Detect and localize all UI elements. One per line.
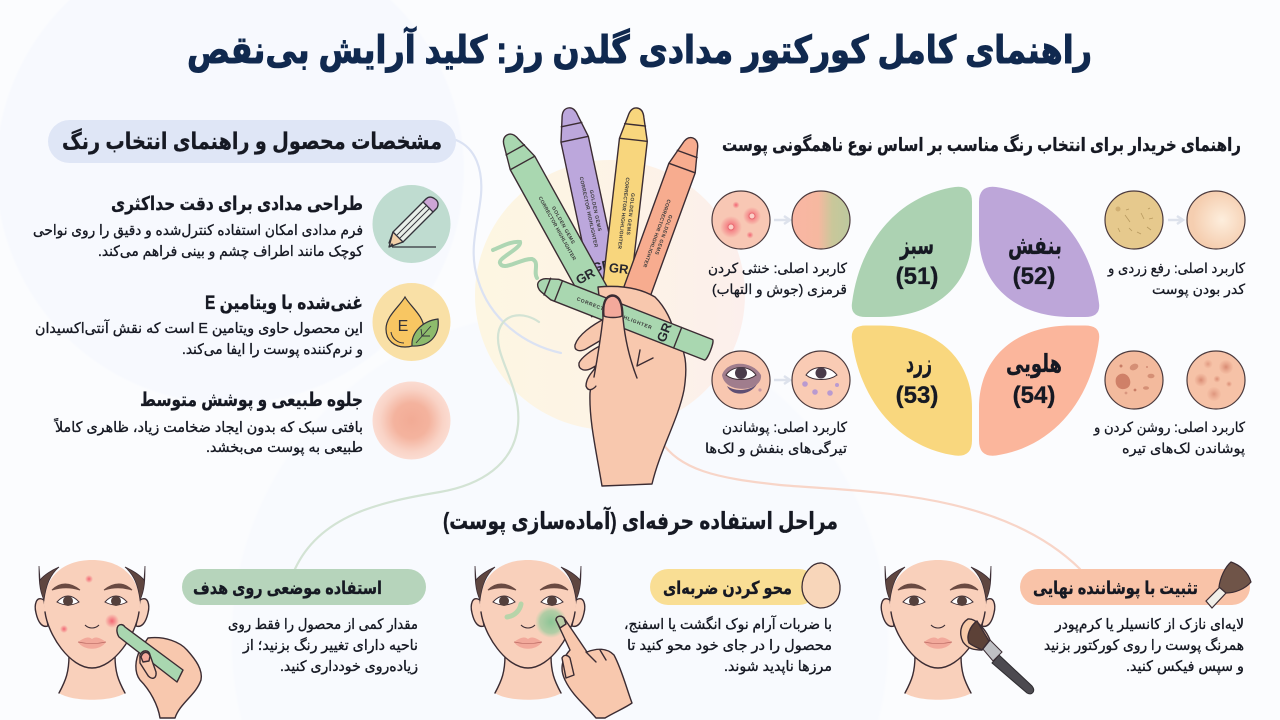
pencil: green held across hand: CORRECTOR HIGHLIGHTER: [576, 296, 653, 331]
petal: purple 52: بنفش: [1008, 232, 1062, 260]
step text: مقدار کمی از محصول را فقط روی: [228, 617, 418, 633]
pencil: purple: CORRECTOR HIGHLIGHTER: [578, 176, 599, 248]
step label with brush: [1020, 562, 1251, 608]
pencil: green: CORRECTOR HIGHLIGHTER: [537, 196, 577, 262]
brush: [961, 619, 1034, 694]
text: peach use: پوشاندن لک‌های تیره: [1122, 440, 1245, 457]
fingers: [575, 318, 608, 390]
text: peach use: کاربرد اصلی: روشن کردن و: [1093, 419, 1245, 436]
arrow: [774, 376, 790, 384]
icon: pencil: [372, 185, 450, 263]
pencil: purple: [554, 105, 620, 292]
swatch: dark spots before: [1105, 351, 1163, 409]
petal: green 51: سبز: [899, 232, 934, 261]
text: green use: کاربرد اصلی: خنثی کردن: [708, 260, 847, 277]
pencil: green: GOLDEN GEMS: [550, 205, 576, 246]
panel: step blending: [471, 560, 840, 718]
text: pencil design: فرم مدادی امکان استفاده کنترل‌شده و دقیق را روی نواحی: [33, 223, 363, 239]
step text: [228, 617, 418, 675]
pencil: yellow: CORRECTOR HIGHLIGHTER: [616, 177, 630, 250]
steps heading: مراحل استفاده حرفه‌ای (آماده‌سازی پوست): [443, 506, 838, 535]
skin swatch: purple use: [1105, 191, 1245, 298]
petal: peach 54: (54): [1013, 382, 1055, 409]
pencil: yellow: [602, 106, 651, 293]
petal: yellow 53: [852, 326, 972, 456]
step label with sponge: محو کردن ضربه‌ای: [663, 578, 792, 599]
heading pill: [48, 120, 456, 163]
green squiggle swatch: [493, 242, 537, 278]
swatch: dull after: [1187, 191, 1245, 249]
panel: step setting: [881, 560, 1251, 700]
text: pencil design: کوچک مانند اطراف چشم و بینی فراهم می‌کند.: [98, 244, 363, 260]
icon: sponge: [802, 563, 840, 608]
petal: purple 52: (52): [1013, 263, 1055, 290]
panel: colour petals: [852, 187, 1099, 456]
swatch: redness after: [792, 191, 850, 249]
petal: peach 54: هلویی: [1006, 350, 1062, 379]
swatch: redness before: [712, 191, 770, 249]
connector: blue curve: [456, 140, 561, 353]
petal: green 51: (51): [896, 263, 938, 290]
icon: vitamin E drop and leaf: E: [398, 318, 408, 335]
step text: مرزها ناپدید شوند.: [724, 659, 832, 675]
panel: product features: [33, 120, 456, 460]
petal: yellow 53: (53): [896, 382, 938, 409]
step text: لایه‌ای نازک از کانسیلر یا کرم‌پودر: [1054, 617, 1244, 633]
pencil: green held across hand: [534, 273, 714, 361]
petal: yellow 53: زرد: [906, 350, 932, 378]
icon: vitamin E drop and leaf: [372, 283, 450, 361]
text: vitamin E: غنی‌شده با ویتامین E: [205, 293, 363, 314]
pencil: peach: GOLDEN GEMS: [653, 214, 673, 256]
hand: [590, 286, 686, 486]
text: pencil design: طراحی مدادی برای دقت حداکثری: [111, 194, 363, 215]
backdrop circle behind hand: [475, 160, 745, 430]
text: natural finish: بافتی سبک که بدون ایجاد ضخامت زیاد، ظاهری کاملاً: [53, 418, 363, 436]
step text: همرنگ پوست را روی کورکتور بزنید: [1044, 636, 1244, 654]
fingertip hand: [556, 616, 632, 718]
panel: step spot application: [35, 560, 426, 718]
text: vitamin E: [35, 293, 363, 358]
pencil: peach: [623, 133, 706, 298]
swatch: dark spots after: [1187, 351, 1245, 409]
skin swatch: green use: [708, 191, 850, 298]
face with green patches: [471, 560, 585, 700]
step label with sponge: [650, 563, 840, 608]
text: yellow use: کاربرد اصلی: پوشاندن: [722, 419, 847, 436]
step text: [1044, 617, 1244, 675]
step label: [182, 569, 426, 605]
petal: purple 52: [979, 187, 1099, 317]
pencil: yellow: GOLDEN GEMS: [625, 193, 635, 236]
skin swatch: peach use: [1093, 351, 1245, 457]
pencil: purple: GR: [590, 256, 613, 275]
text: natural finish: جلوه طبیعی و پوشش متوسط: [140, 390, 363, 411]
text: purple use: کدر بودن پوست: [1152, 281, 1245, 298]
connector: green curve: [295, 315, 539, 569]
step text: زیاده‌روی خودداری کنید.: [280, 659, 418, 675]
pencil: green: GR: [573, 265, 598, 288]
text: natural finish: طبیعی به پوست می‌بخشد.: [206, 440, 363, 456]
connector: peach curve: [660, 440, 1080, 569]
text: yellow use: [705, 419, 847, 457]
face with blemishes: [35, 560, 149, 700]
petal: green 51: [852, 187, 972, 317]
text: vitamin E: و نرم‌کننده پوست را ایفا می‌کند.: [182, 342, 363, 358]
text: yellow use: تیرگی‌های بنفش و لک‌ها: [705, 440, 847, 457]
text: pencil design: [33, 194, 363, 260]
text: natural finish: [53, 390, 363, 456]
step text: [624, 615, 832, 675]
text: green use: قرمزی (جوش و التهاب): [712, 281, 847, 298]
petal: peach 54: [979, 326, 1099, 456]
swatch: dull before: [1105, 191, 1163, 249]
step label with brush: تثبیت با پوشاننده نهایی: [1033, 578, 1198, 599]
pencil: purple: GOLDEN GEMS: [588, 189, 602, 232]
step text: و سپس فیکس کنید.: [1126, 659, 1244, 675]
skin swatch: yellow use: [705, 351, 850, 457]
step text: با ضربات آرام نوک انگشت یا اسفنج،: [624, 615, 832, 633]
text: vitamin E: این محصول حاوی ویتامین E است که نقش آنتی‌اکسیدان: [35, 319, 363, 337]
swatch: bruise after: [792, 351, 850, 409]
text: purple use: کاربرد اصلی: رفع زردی و: [1107, 260, 1245, 277]
face with even tone: [881, 560, 995, 700]
illustration: corrector pencils in hand: [493, 105, 714, 486]
icon: powder brush: [1206, 562, 1251, 608]
pencil: peach: CORRECTOR HIGHLIGHTER: [641, 198, 671, 268]
arrow: [774, 216, 790, 224]
hand holding corrector: [117, 625, 201, 718]
pencil: yellow: GR: [608, 260, 630, 277]
title: راهنمای کامل کورکتور مدادی گلدن رز: کلید آرایش بی‌نقص: [187, 26, 1092, 72]
step text: محصول را در جای خود محو کنید تا: [627, 638, 832, 654]
heading pill: مشخصات محصول و راهنمای انتخاب رنگ: [62, 128, 442, 155]
pencil: green: [495, 128, 616, 317]
text: green use: [708, 260, 847, 298]
step text: ناحیه دارای تغییر رنگ بزنید؛ از: [242, 636, 418, 654]
swatch: bruise before: [712, 351, 770, 409]
step label: استفاده موضعی روی هدف: [193, 578, 382, 599]
text: peach use: [1093, 419, 1245, 457]
thumb: [594, 295, 653, 400]
icon: natural coverage swatch: [372, 382, 450, 460]
text: purple use: [1107, 260, 1245, 298]
arrow: [1168, 216, 1183, 224]
pencil: green held across hand: GR: [654, 320, 675, 344]
